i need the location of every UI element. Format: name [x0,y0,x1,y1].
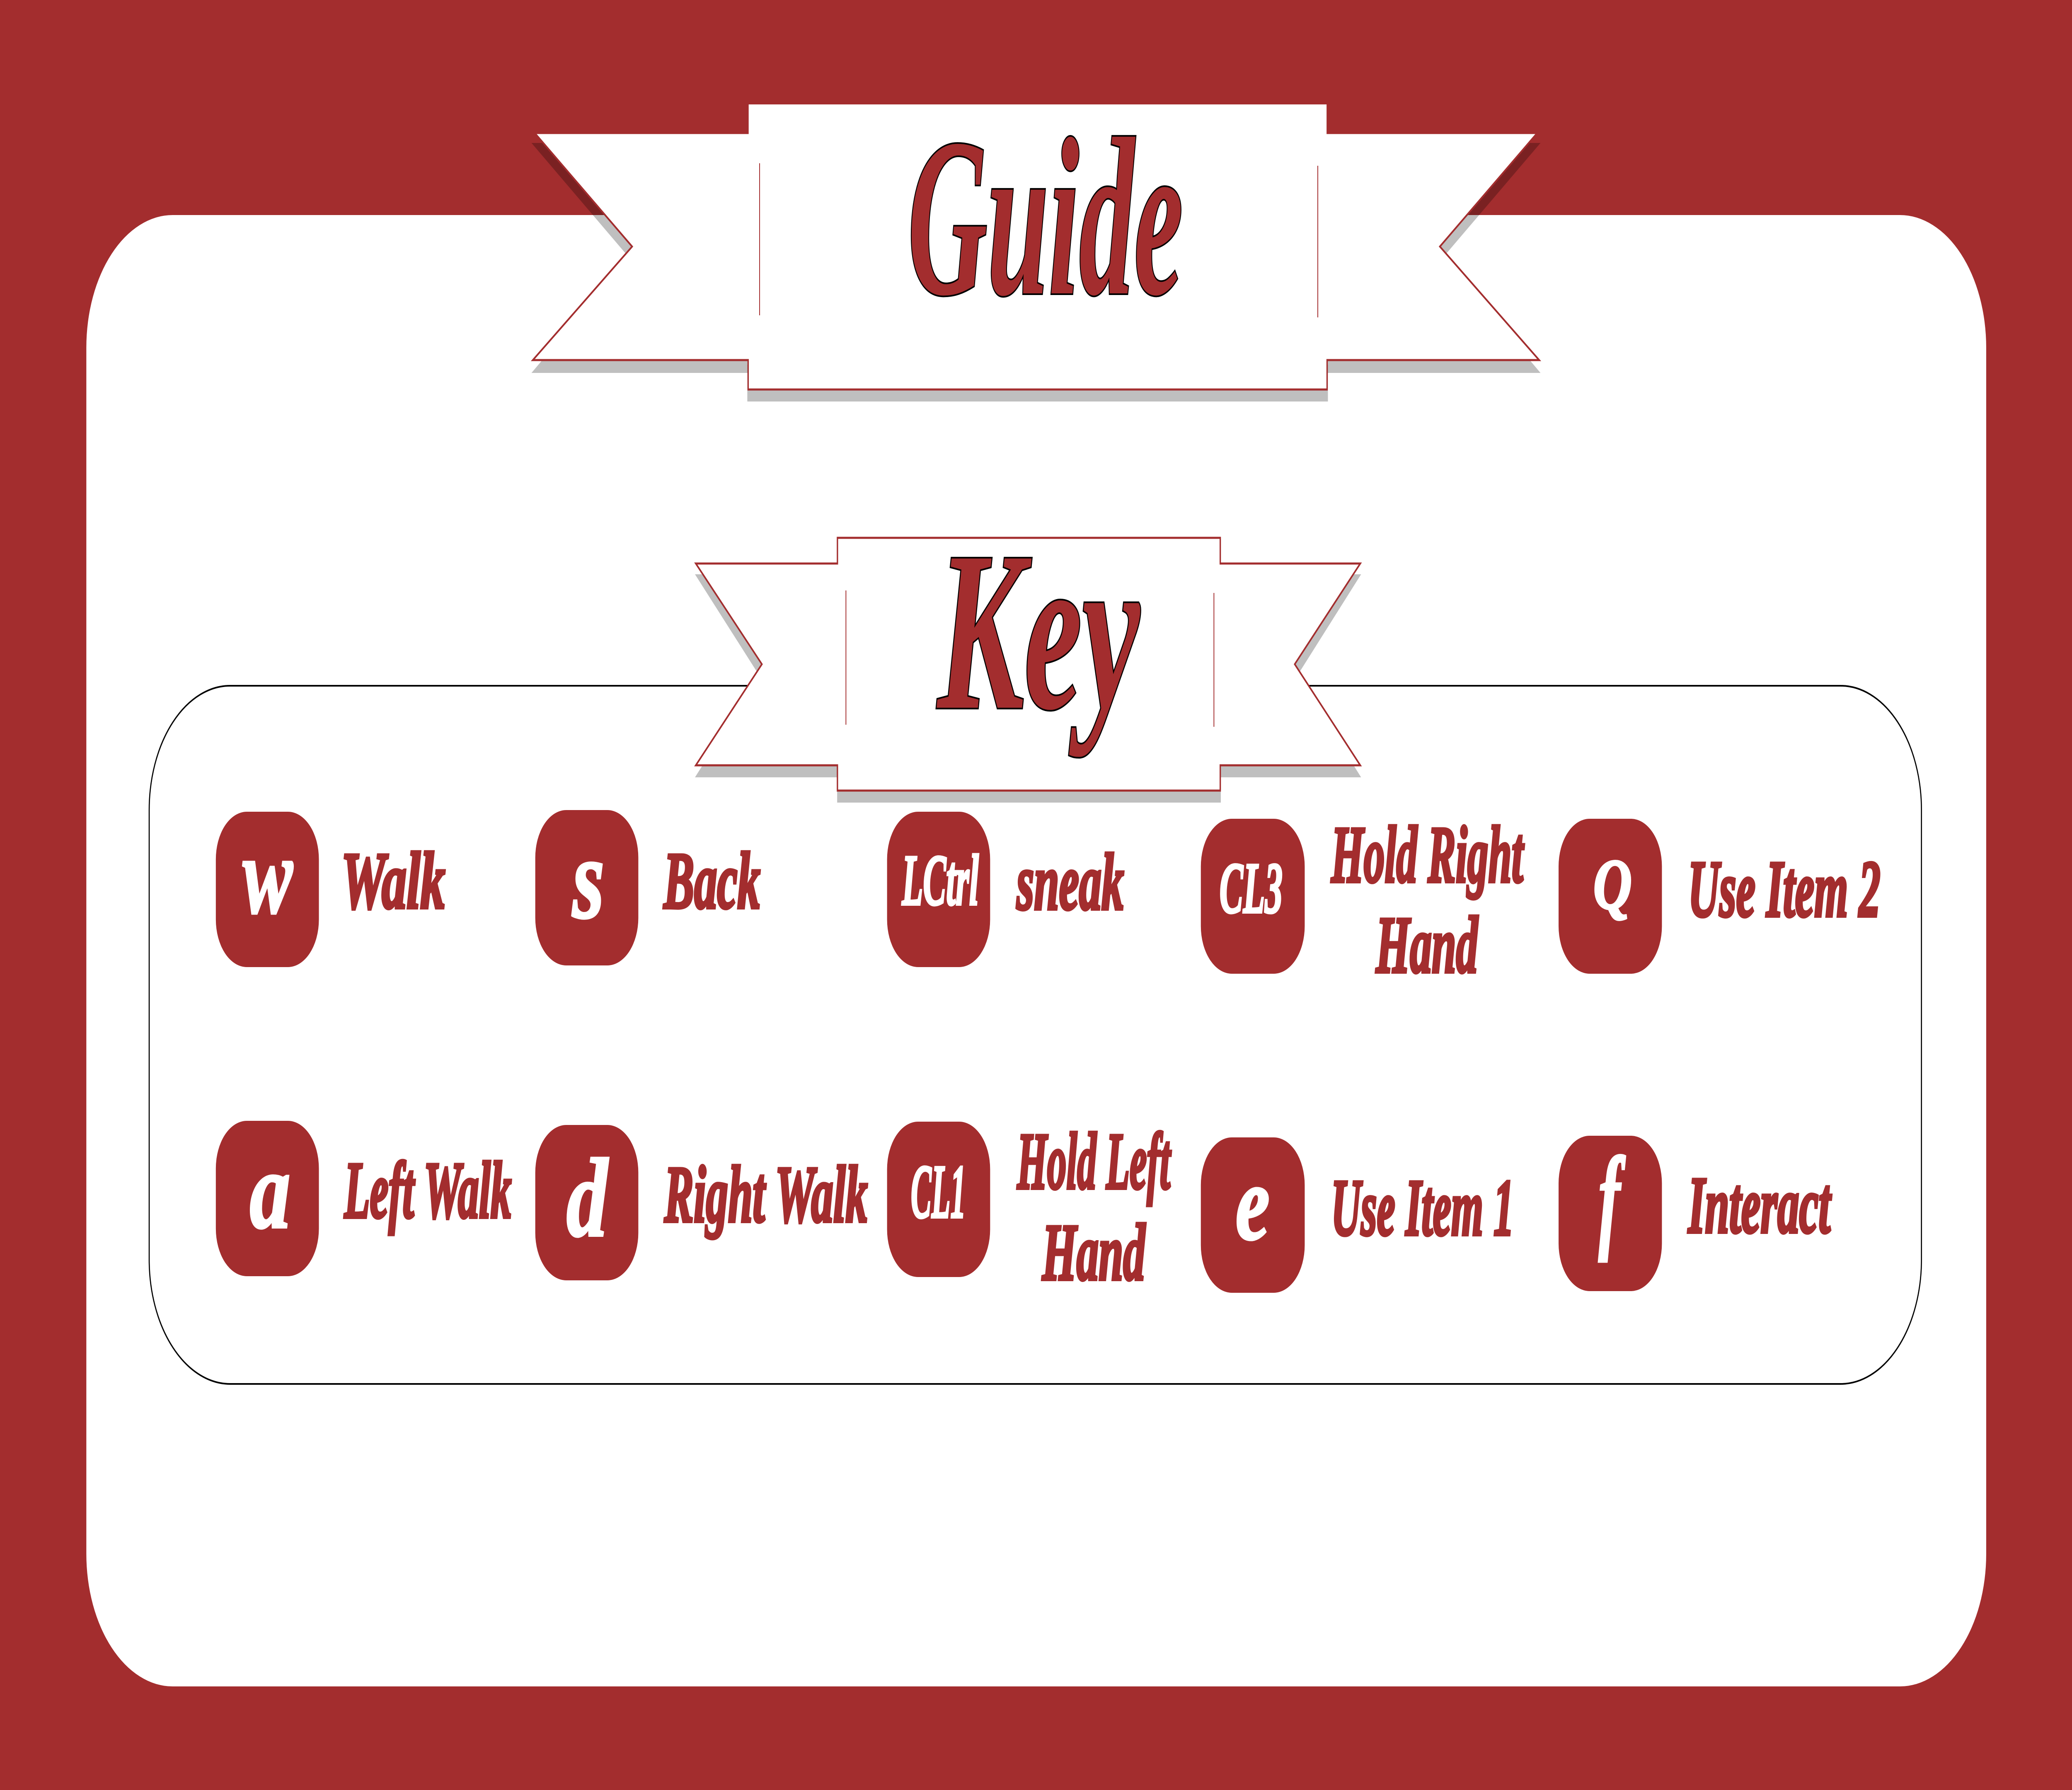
label: Hold Left Hand: Hand [1042,1208,1146,1297]
key: f [1559,1133,1662,1291]
key: w [216,812,319,967]
title: Guide: Guide [908,92,1183,342]
key: d: d [566,1136,609,1260]
panel: key outline [149,686,1922,1384]
key: d [535,1125,638,1280]
label: Use Item 2: Use Item 2 [1688,844,1881,934]
key: s [535,810,638,965]
banner: Key [695,505,1361,803]
label: Interact: Interact [1687,1161,1832,1250]
banner: Guide [532,92,1540,402]
key: e: e [1236,1143,1270,1263]
label: Hold Right Hand [1331,810,1525,990]
ribbon shape [696,538,1360,791]
key: w: w [243,815,293,936]
key: CL1: CL1 [911,1149,966,1234]
label: Left Walk: Left Walk [344,1146,511,1235]
panel: white content card [86,215,1986,1686]
right tail shadow [1220,574,1361,777]
label: Right Walk: Right Walk [664,1150,868,1239]
key: f: f [1598,1133,1626,1262]
left inner rule [759,163,760,315]
ribbon white top [749,104,1326,134]
key: Q: Q [1593,845,1632,924]
left tail shadow [695,574,838,777]
key: a [216,1121,319,1276]
label: sneak: sneak [1016,837,1124,927]
key: e [1201,1137,1305,1293]
ribbon shape [533,104,1539,389]
left tail shadow [532,143,748,373]
label: Back: Back [663,836,760,926]
key: CL3: CL3 [1220,848,1283,928]
label: Hold Right Hand: Hand [1375,900,1479,990]
title: Key: Key [935,505,1141,757]
right inner rule [1213,593,1214,727]
key: LCtrl: LCtrl [901,840,979,920]
key: CL3 [1201,819,1305,974]
label: Walk: Walk [341,836,445,926]
label: Hold Right Hand: Hold Right [1331,810,1525,900]
right tail shadow [1327,143,1540,373]
center shadow [747,365,1328,402]
label: Use Item 1: Use Item 1 [1331,1163,1514,1253]
left inner rule [845,590,846,725]
label: Hold Left Hand: Hold Left [1017,1117,1172,1206]
key: CL1 [887,1122,990,1277]
label: Hold Left Hand [1017,1117,1172,1297]
key: Q [1559,819,1662,974]
key: a: a [250,1130,290,1251]
key: LCtrl [887,812,990,967]
center shadow [837,779,1221,803]
right inner rule [1317,166,1318,317]
key: s: s [571,814,604,943]
